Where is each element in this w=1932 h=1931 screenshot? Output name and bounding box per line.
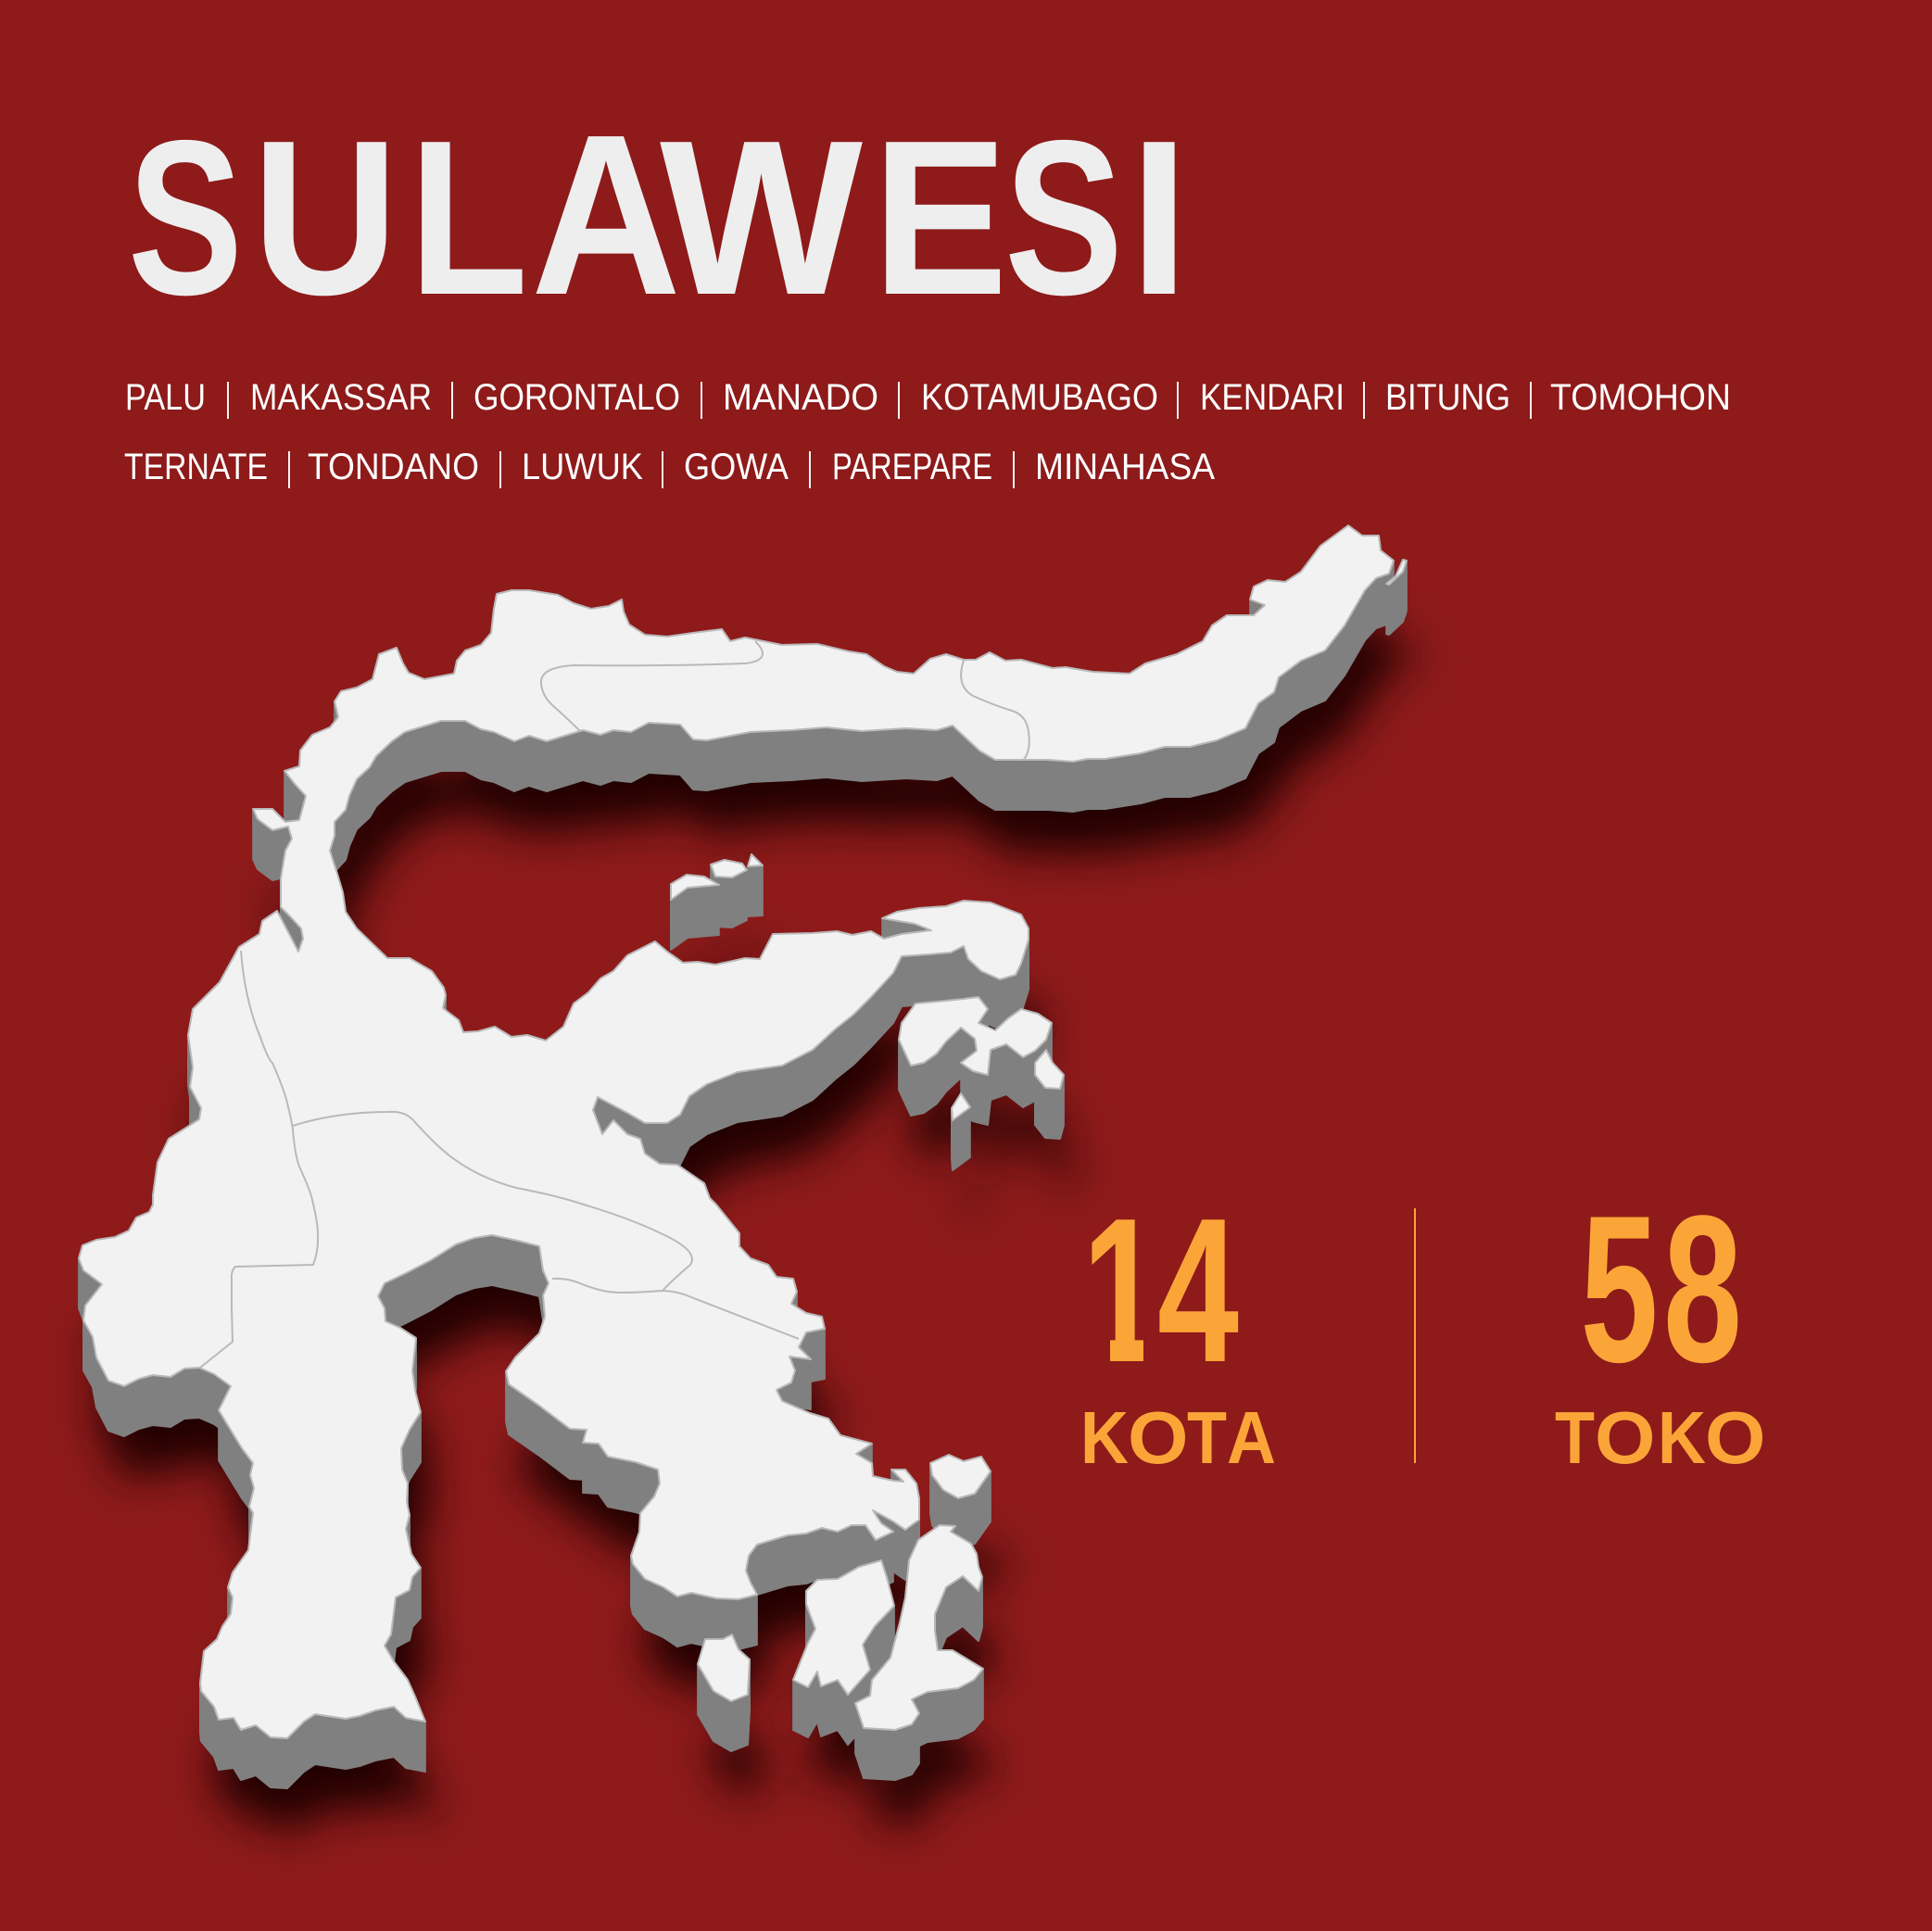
city list row 1: MANADO <box>723 377 878 418</box>
city list row 2: | <box>807 445 813 489</box>
number 14: 4 <box>1157 1176 1239 1406</box>
map drop shadow <box>92 618 1420 1831</box>
title: W <box>660 95 863 341</box>
city list row 1: | <box>1361 375 1367 420</box>
province boundaries <box>200 641 1029 1368</box>
city list row 1: | <box>1175 375 1181 420</box>
number 58: 8 <box>1663 1171 1742 1406</box>
city list row 2: GOWA <box>684 447 789 487</box>
city list row 2: LUWUK <box>522 447 643 487</box>
city list row 2: | <box>286 445 292 489</box>
city list row 1 <box>125 375 1731 420</box>
city list row 2: | <box>1011 445 1017 489</box>
label TOKO: O <box>1595 1396 1655 1479</box>
number 14: 1 <box>1082 1176 1161 1406</box>
map top surface <box>79 525 1407 1738</box>
city list row 2: TERNATE <box>124 447 268 487</box>
city list row 2 <box>124 445 1215 489</box>
title: L <box>409 95 528 341</box>
city list row 1: | <box>699 375 704 420</box>
city list row 1: KENDARI <box>1200 377 1345 418</box>
city list row 2: | <box>498 445 503 489</box>
label KOTA: O <box>1128 1396 1188 1479</box>
label TOKO: T <box>1555 1396 1595 1479</box>
city list row 1: PALU <box>125 377 206 418</box>
city list row 2: | <box>660 445 665 489</box>
3D map of Sulawesi <box>79 525 1420 1831</box>
title: S <box>128 95 243 341</box>
city list row 2: TONDANO <box>308 447 479 487</box>
city list row 1: | <box>449 375 455 420</box>
map extrusion sides <box>79 527 1407 1788</box>
number 58: 5 <box>1581 1171 1659 1406</box>
label KOTA: T <box>1187 1396 1227 1479</box>
city list row 2: MINAHASA <box>1035 447 1215 487</box>
title: S <box>1004 95 1123 341</box>
divider <box>1414 1208 1416 1463</box>
stat: 14 kota <box>1084 1219 1274 1464</box>
label TOKO: K <box>1658 1396 1706 1479</box>
label KOTA: K <box>1080 1396 1129 1479</box>
city list row 1: MAKASSAR <box>250 377 432 418</box>
stat: 58 toko <box>1555 1171 1766 1479</box>
city list row 1: TOMOHON <box>1550 377 1731 418</box>
city list row 2: PAREPARE <box>832 447 992 487</box>
title: A <box>531 87 681 343</box>
title: I <box>1130 95 1189 341</box>
city list row 1: | <box>1528 375 1534 420</box>
title: U <box>252 95 398 341</box>
label TOKO: O <box>1705 1396 1766 1479</box>
city list <box>124 375 1731 489</box>
city list row 1: KOTAMUBAGO <box>921 377 1158 418</box>
title: E <box>873 95 1008 341</box>
city list row 1: BITUNG <box>1385 377 1510 418</box>
city list row 1: GORONTALO <box>474 377 680 418</box>
city list row 1: | <box>225 375 231 420</box>
city list row 1: | <box>896 375 902 420</box>
label KOTA: A <box>1227 1396 1276 1479</box>
